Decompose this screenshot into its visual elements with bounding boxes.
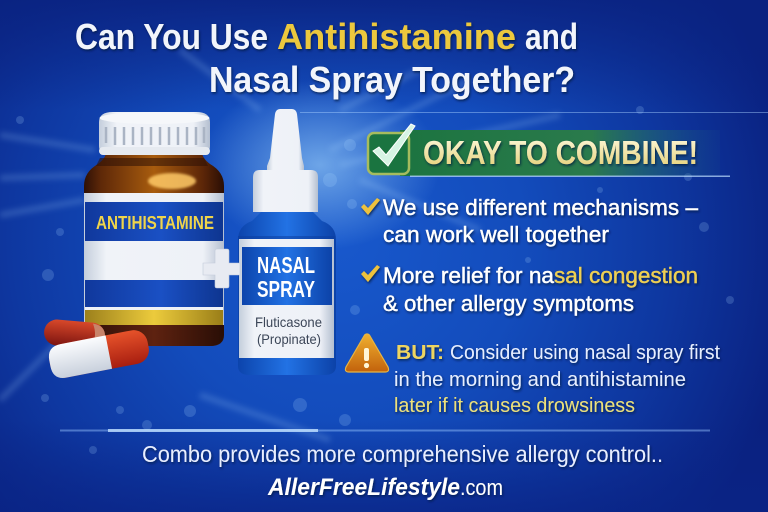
icon: check <box>361 198 380 215</box>
spray drug name: Fluticasone <box>255 314 322 330</box>
spray drug name <box>255 314 322 347</box>
collar <box>253 170 318 212</box>
bullet: mechanisms: can work well together <box>383 222 609 247</box>
spray drug name: (Propinate) <box>257 331 321 347</box>
footer website: AllerFreeLifestyle <box>267 474 460 501</box>
title: Antihistamine <box>277 16 516 57</box>
spray label title <box>257 252 315 302</box>
bottle cap <box>99 112 210 155</box>
title: Can You Use <box>75 16 268 57</box>
icon: check <box>361 265 380 282</box>
bullet: congestion: sal congestion <box>554 263 698 288</box>
nasal spray bottle <box>238 109 336 375</box>
bullet: congestion: & other allergy symptoms <box>383 291 634 316</box>
warning text: BUT: <box>396 341 444 364</box>
spray label band <box>242 247 332 305</box>
warning note <box>345 334 720 417</box>
bullet: congestion: More relief for na <box>383 263 555 288</box>
footer summary: Combo provides more comprehensive allergy control.. <box>142 441 663 467</box>
warning text: Consider using nasal spray first <box>450 341 720 364</box>
warning text: later if it causes drowsiness <box>394 394 635 417</box>
bottle label text: ANTIHISTAMINE <box>96 213 214 233</box>
warning text: in the morning and antihistamine <box>394 368 686 391</box>
capsule: dark red <box>43 318 106 350</box>
banner: okay to combine <box>368 124 730 177</box>
footer website: .com <box>460 475 503 500</box>
bullet: congestion <box>361 263 698 316</box>
plus sign <box>203 249 240 288</box>
title: Nasal Spray Together? <box>209 59 575 100</box>
icon: warning triangle <box>345 334 389 372</box>
capsules <box>43 318 151 380</box>
warning text <box>394 341 720 417</box>
title <box>75 16 578 100</box>
bottle label band <box>85 202 223 241</box>
bullet: mechanisms: We use different mechanisms – <box>383 195 699 220</box>
bullet: mechanisms <box>361 195 699 247</box>
spray label title: NASAL <box>257 252 315 278</box>
spray label title: SPRAY <box>257 276 315 302</box>
nozzle <box>267 109 304 172</box>
banner text: OKAY TO COMBINE! <box>423 134 698 171</box>
pill bottle: antihistamine <box>84 112 224 346</box>
capsule: white and red <box>47 328 151 380</box>
icon: check box <box>368 124 415 174</box>
title: and <box>525 16 578 57</box>
